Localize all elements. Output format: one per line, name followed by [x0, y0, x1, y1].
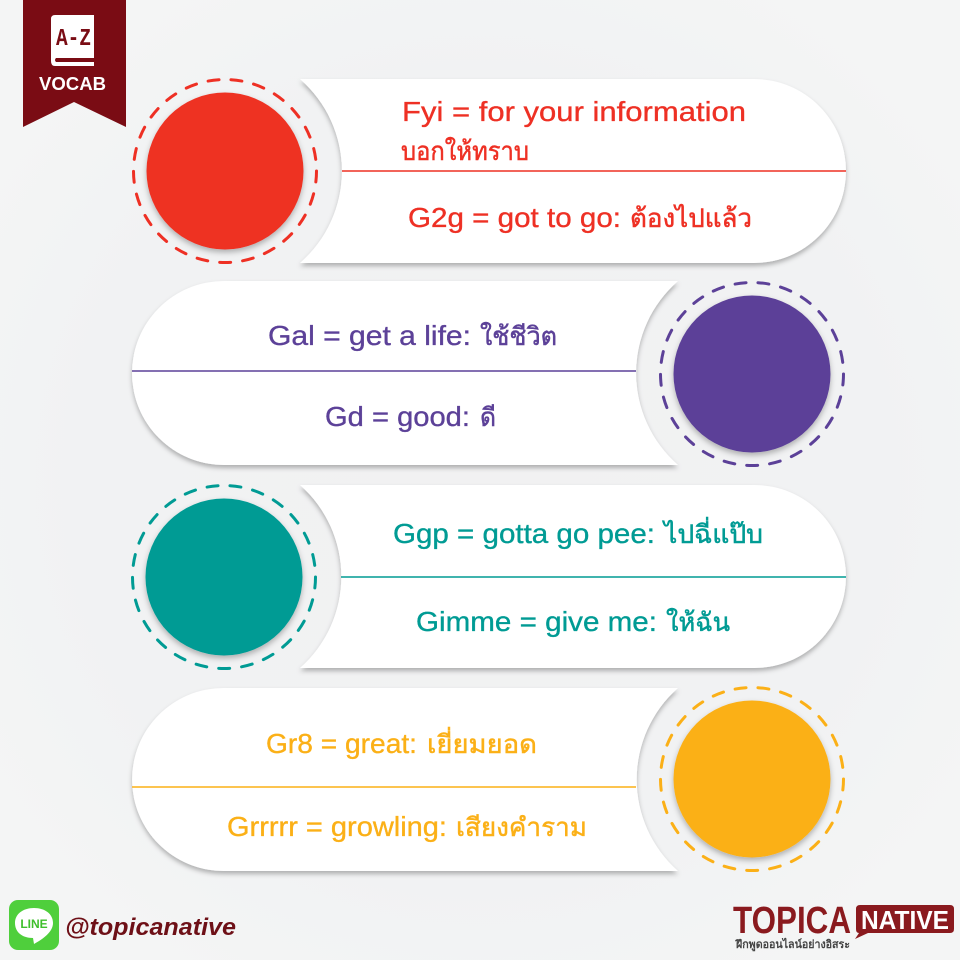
text: Gr8 [266, 727, 537, 759]
logo: Topica Native: TOPICA [733, 900, 851, 942]
icon: A-Z book: A-Z [56, 26, 91, 53]
ribbon badge: A-Z vocab [23, 0, 126, 127]
LINE contact [9, 900, 236, 950]
dashed ring [134, 80, 316, 262]
white card [132, 688, 678, 871]
text: G2g: ต้องไปแล้ว [630, 204, 752, 233]
text: Ggp: Ggp = gotta go pee: [393, 518, 655, 549]
panel: yellow row [132, 688, 844, 871]
logo: Topica Native: NATIVE [861, 905, 949, 935]
text: Gd: Gd = good: [325, 401, 470, 432]
white card [300, 79, 846, 263]
text: Ggp [393, 517, 763, 549]
text: Gd: ดี [480, 404, 496, 432]
logo: Topica Native [733, 900, 954, 952]
divider line [132, 370, 636, 372]
text: Fyi: Fyi = for your information [402, 96, 746, 127]
text: Ggp: ไปฉี่แป๊บ [662, 517, 763, 549]
circle icon [146, 92, 304, 250]
text: Gimme: Gimme = give me: [416, 606, 657, 637]
text: Grrrrr: Grrrrr = growling: [227, 811, 447, 842]
white card [132, 281, 678, 465]
text: Gal: Gal = get a life: [268, 320, 471, 351]
divider line [342, 170, 846, 172]
circle icon [146, 498, 302, 656]
panel: purple row [132, 281, 844, 466]
ribbon badge: A-Z vocab: VOCAB [39, 74, 106, 94]
dashed ring [660, 688, 844, 870]
divider line [132, 786, 636, 788]
text: G2g: G2g = got to go: [408, 202, 621, 233]
circle icon [674, 296, 830, 452]
text: Gr8: Gr8 = great: [266, 728, 417, 759]
panel: red row [134, 79, 846, 263]
text: G2g [408, 202, 752, 233]
white card [300, 485, 846, 668]
logo: Topica Native: ฝึกพูดออนไลน์อย่างอิสระ [734, 937, 850, 952]
divider line [341, 576, 846, 578]
text: Gimme: ให้ฉัน [666, 608, 730, 637]
icon: LINE app: LINE [20, 917, 48, 931]
handle: @topicanative [65, 914, 236, 941]
text: Gal [268, 320, 557, 351]
dashed ring [660, 282, 844, 466]
icon: LINE app [9, 900, 59, 950]
text: Grrrrr [227, 811, 587, 842]
text: Gal: ใช้ชีวิต [480, 322, 557, 351]
panel: teal row [132, 485, 846, 668]
text: Gr8: เยี่ยมยอด [427, 727, 537, 759]
text: Grrrrr: เสียงคำราม [456, 814, 587, 842]
circle icon [674, 700, 830, 858]
dashed ring [132, 486, 316, 668]
text: Thai translation: บอกให้ทราบ [401, 137, 529, 166]
